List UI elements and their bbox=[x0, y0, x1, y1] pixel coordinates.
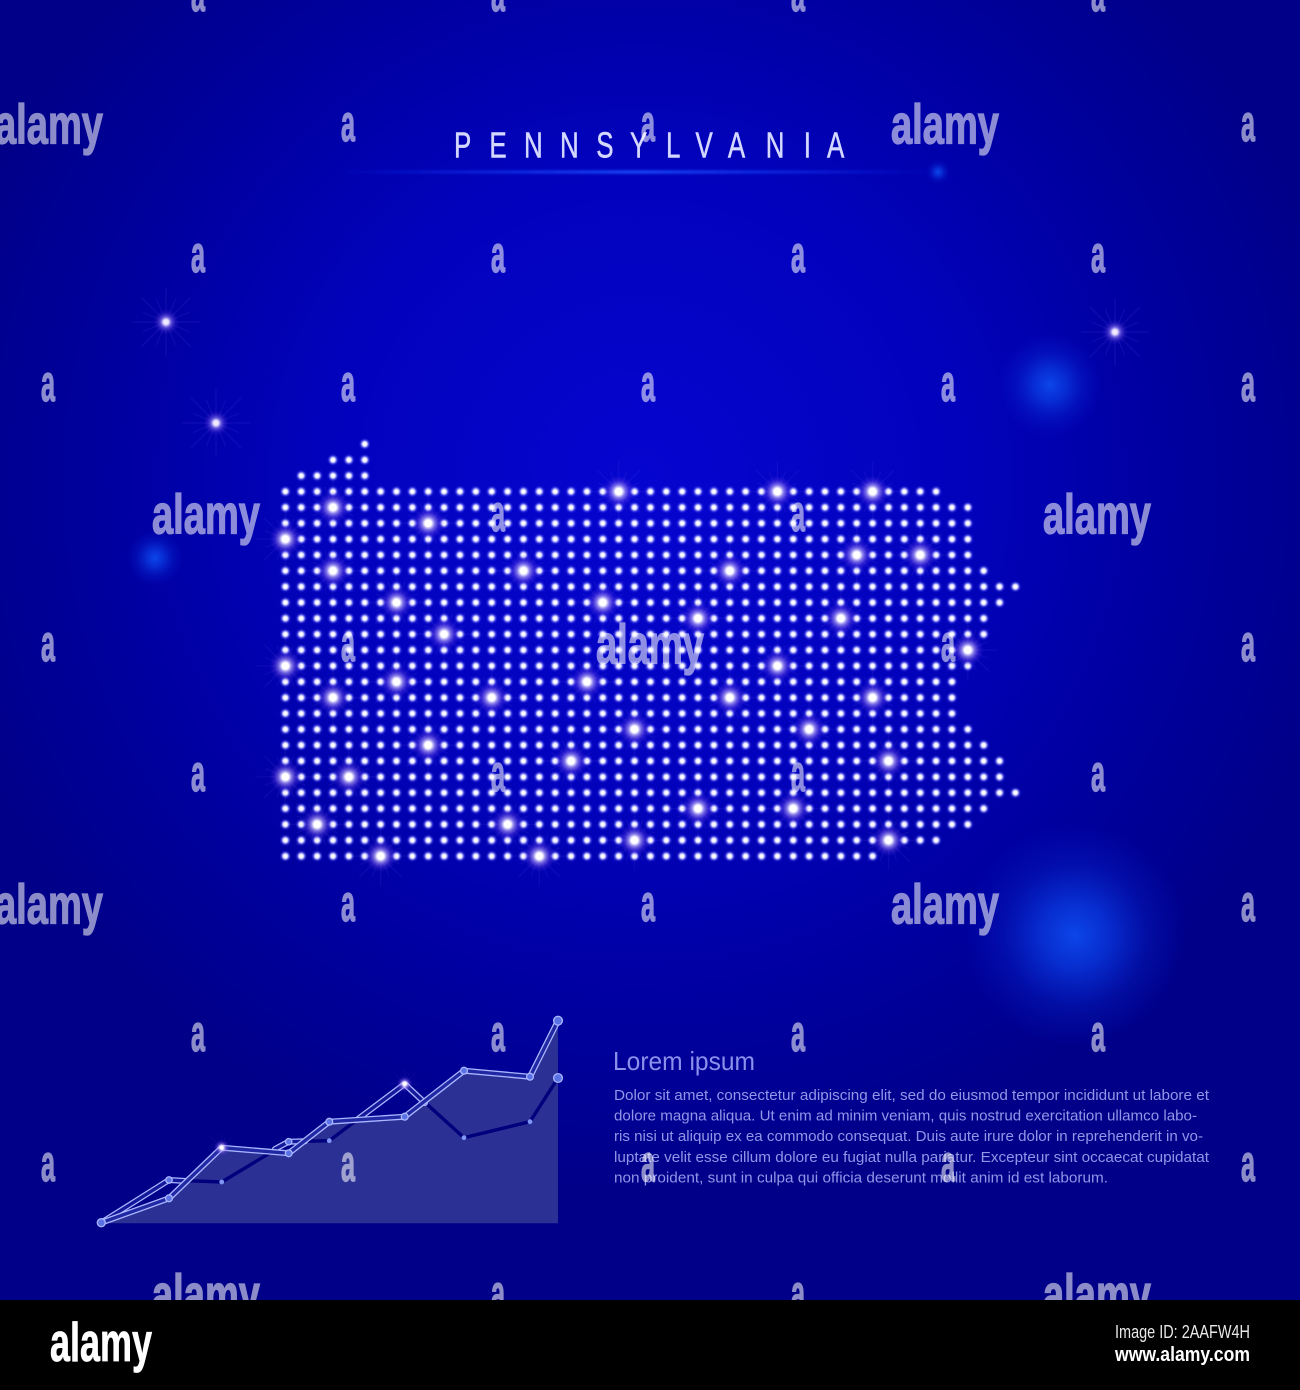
watermarks: a bbox=[791, 226, 806, 284]
watermarks: a bbox=[1241, 95, 1256, 153]
watermarks: a bbox=[491, 1265, 506, 1323]
text block paragraph: dolore magna aliqua. Ut enim ad minim veniam, quis nostrud exercitation ullamco labo- bbox=[614, 1108, 1197, 1124]
watermarks: a bbox=[1091, 226, 1106, 284]
text block paragraph: ris nisi ut aliquip ex ea commodo consequat. Duis aute irure dolor in reprehenderit in vo- bbox=[614, 1128, 1203, 1145]
watermarks: alamy bbox=[596, 612, 704, 676]
watermarks: a bbox=[641, 95, 656, 153]
watermarks: a bbox=[941, 615, 956, 673]
text block paragraph bbox=[614, 1087, 1210, 1187]
watermarks: a bbox=[191, 745, 206, 803]
watermarks: a bbox=[341, 1135, 356, 1193]
watermarks: a bbox=[641, 875, 656, 933]
watermarks: a bbox=[791, 485, 806, 543]
watermarks: a bbox=[1091, 1005, 1106, 1063]
footer logo: alamy bbox=[50, 1311, 152, 1373]
watermarks: a bbox=[191, 226, 206, 284]
chart series 2 line bbox=[101, 1078, 558, 1223]
watermarks: a bbox=[341, 875, 356, 933]
watermarks: a bbox=[791, 1265, 806, 1323]
watermarks: a bbox=[1091, 745, 1106, 803]
watermarks: a bbox=[641, 1135, 656, 1193]
watermarks: a bbox=[1241, 875, 1256, 933]
watermarks: alamy bbox=[1043, 482, 1151, 546]
watermarks: a bbox=[491, 485, 506, 543]
star: upper left bbox=[132, 288, 200, 356]
watermarks: a bbox=[341, 615, 356, 673]
footer image id: Image ID: 2AAFW4H bbox=[1115, 1322, 1250, 1342]
watermarks: a bbox=[191, 1005, 206, 1063]
chart nodes bbox=[97, 1016, 562, 1227]
watermarks: a bbox=[791, 745, 806, 803]
watermarks: a bbox=[641, 355, 656, 413]
watermarks: a bbox=[941, 355, 956, 413]
watermarks: a bbox=[791, 1005, 806, 1063]
watermarks: a bbox=[41, 355, 56, 413]
dot map of Pennsylvania bbox=[255, 444, 1016, 886]
chart area fill bbox=[101, 1021, 558, 1223]
glow: left bbox=[127, 530, 183, 586]
watermarks: alamy bbox=[1043, 1262, 1151, 1326]
chart series 1 line bbox=[101, 1021, 558, 1223]
watermarks: a bbox=[1241, 615, 1256, 673]
watermarks: a bbox=[341, 355, 356, 413]
text block paragraph: luptate velit esse cillum dolore eu fugiat nulla pariatur. Excepteur sint occaecat cupidatat bbox=[614, 1149, 1210, 1166]
watermarks: alamy bbox=[891, 872, 999, 936]
star: left bbox=[182, 389, 250, 457]
text block paragraph: non proident, sunt in culpa qui officia deserunt mollit anim id est laborum. bbox=[614, 1170, 1108, 1187]
star: upper right bbox=[1081, 298, 1149, 366]
glow: upper right bbox=[998, 333, 1102, 437]
footer url: www.alamy.com bbox=[1114, 1344, 1250, 1366]
watermarks: a bbox=[1241, 355, 1256, 413]
watermarks: a bbox=[491, 226, 506, 284]
bright map lights bbox=[255, 462, 998, 886]
watermarks: a bbox=[41, 615, 56, 673]
watermarks: a bbox=[41, 1135, 56, 1193]
watermarks: a bbox=[491, 1005, 506, 1063]
watermarks: a bbox=[341, 95, 356, 153]
text block paragraph: Dolor sit amet, consectetur adipiscing elit, sed do eiusmod tempor incididunt ut labore et bbox=[614, 1087, 1210, 1104]
watermarks: a bbox=[1241, 1135, 1256, 1193]
text block heading: Lorem ipsum bbox=[613, 1046, 755, 1076]
watermarks: alamy bbox=[152, 482, 260, 546]
glow: lower right bbox=[963, 823, 1187, 1047]
watermarks: a bbox=[491, 745, 506, 803]
title: PENNSYLVANIA bbox=[454, 125, 844, 166]
title underline bbox=[335, 160, 950, 184]
chart highlights bbox=[207, 1069, 420, 1163]
watermarks: alamy bbox=[891, 92, 999, 156]
watermarks: alamy bbox=[152, 1262, 260, 1326]
footer bar bbox=[0, 1300, 1300, 1390]
watermarks: a bbox=[941, 1135, 956, 1193]
area chart bbox=[97, 1016, 562, 1227]
